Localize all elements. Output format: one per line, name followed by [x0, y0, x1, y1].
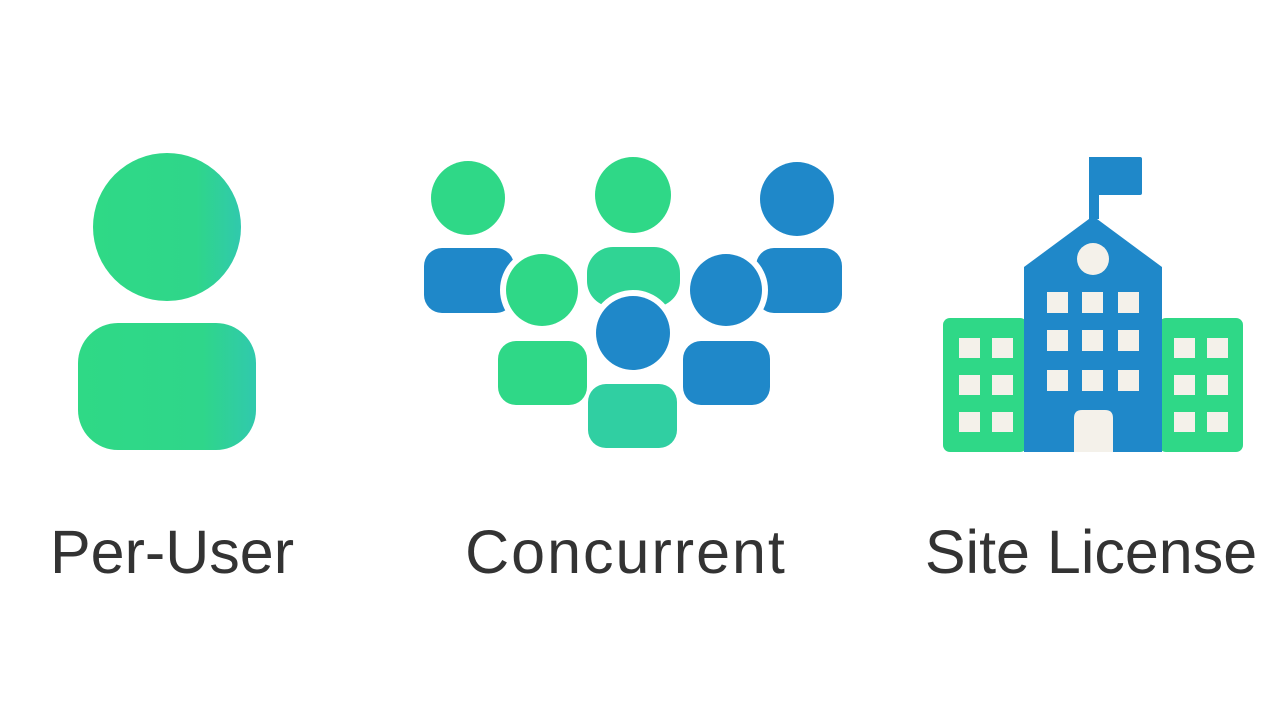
- label: concurrent: Concurrent: [465, 518, 787, 586]
- icon: per-user: [78, 153, 256, 450]
- label: site license: Site License: [925, 518, 1257, 586]
- icon: site building: [943, 157, 1243, 452]
- label: per-user: Per-User: [50, 518, 294, 586]
- icon: concurrent users group: [424, 157, 842, 448]
